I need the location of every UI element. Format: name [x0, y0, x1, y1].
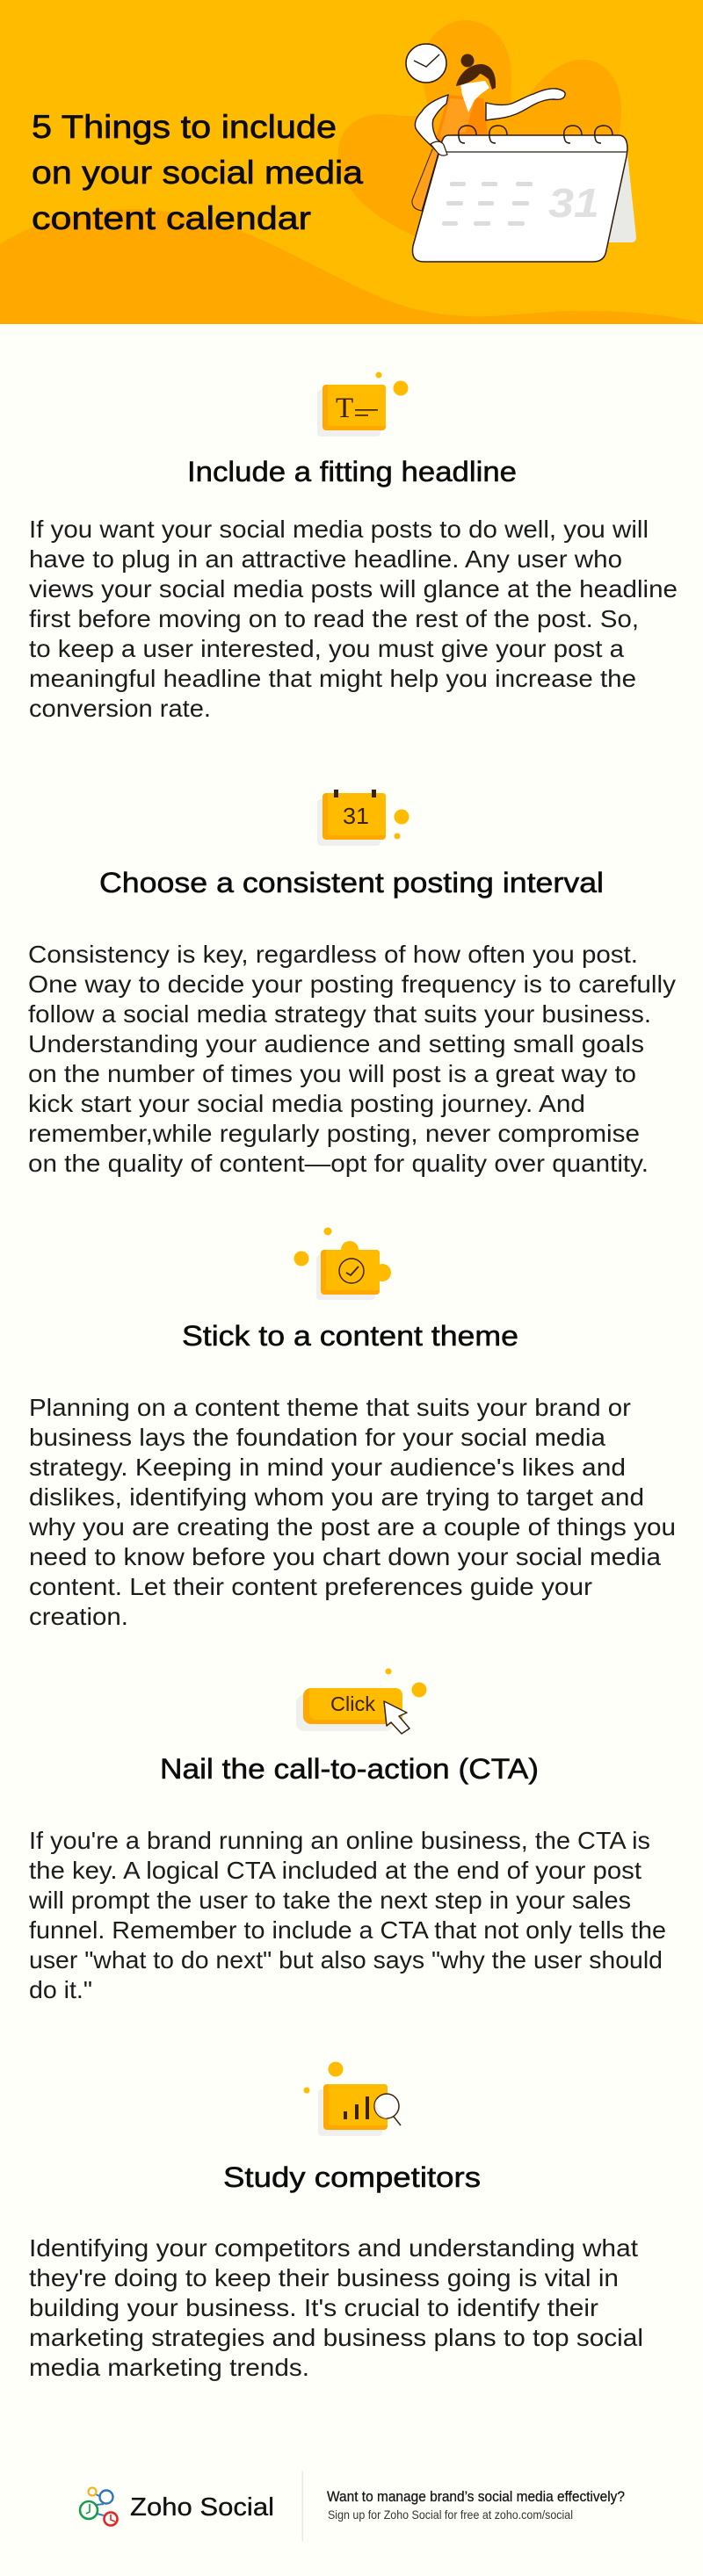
footer call to action: Want to manage brand’s social media effectively? — [327, 2488, 625, 2505]
title: on your social media — [32, 155, 363, 191]
section 5 paragraph: they're doing to keep their business going is vital in — [29, 2264, 619, 2291]
section 2 paragraph: follow a social media strategy that suits your business. — [28, 1000, 651, 1028]
section 2 paragraph: One way to decide your posting frequency is to carefully — [28, 971, 676, 998]
section 1 paragraph: have to plug in an attractive headline. Any user who — [29, 545, 622, 573]
section 3 paragraph: Planning on a content theme that suits your brand or — [29, 1394, 631, 1421]
section 5 heading: Study competitors — [223, 2161, 481, 2193]
section 1 paragraph: views your social media posts will glance at the headline — [29, 575, 678, 603]
section 4 icon: click button with cursor — [296, 1669, 427, 1734]
section 2 paragraph: on the number of times you will post is a great way to — [28, 1060, 636, 1087]
footer: Zoho Social logo: Zoho Social — [130, 2493, 274, 2522]
section 1 paragraph: to keep a user interested, you must give your post a — [29, 635, 624, 662]
title — [32, 109, 363, 236]
calendar body — [413, 135, 627, 262]
title: 5 Things to include — [32, 109, 337, 145]
section 2 icon: calendar — [317, 790, 409, 846]
calendar header line and rings — [442, 126, 627, 152]
calendar date number: 31 — [548, 180, 599, 226]
title: content calendar — [32, 200, 311, 236]
section 1 paragraph: If you want your social media posts to do well, you will — [29, 516, 649, 543]
footer call to action: Sign up for Zoho Social for free at zoho.com/social — [328, 2507, 573, 2522]
section 2 paragraph: remember,while regularly posting, never compromise — [28, 1120, 640, 1147]
section 3 paragraph — [28, 1394, 676, 1630]
section 4 paragraph: do it." — [29, 1976, 92, 2003]
calendar stand — [606, 154, 636, 242]
section 5 paragraph — [29, 2234, 643, 2381]
section 1 paragraph: conversion rate. — [29, 695, 211, 722]
section 5 icon: bar chart and magnifier — [304, 2062, 401, 2136]
section 2 paragraph: on the quality of content—opt for quality over quantity. — [28, 1150, 649, 1177]
section 5 paragraph: marketing strategies and business plans to top social — [29, 2324, 643, 2351]
calendar date dashes — [442, 182, 533, 226]
section 4 paragraph: user "what to do next" but also says "why the user should — [29, 1946, 663, 1973]
section 2 icon: calendar: 31 — [343, 803, 369, 829]
section 3 paragraph: content. Let their content preferences guide your — [29, 1573, 592, 1600]
footer call to action — [327, 2488, 625, 2522]
section 1 paragraph: first before moving on to read the rest of the post. So, — [29, 605, 639, 632]
section 3 paragraph: strategy. Keeping in mind your audience's likes and — [29, 1454, 626, 1481]
section 4 heading: Nail the call-to-action (CTA) — [160, 1753, 539, 1785]
figure: woman — [412, 54, 565, 211]
section 4 paragraph: will prompt the user to take the next step in your sales — [28, 1887, 631, 1914]
section 1 heading: Include a fitting headline — [187, 456, 517, 487]
section 2 heading: Choose a consistent posting interval — [99, 867, 604, 898]
footer: Zoho Social logo — [80, 2487, 274, 2526]
section 2 paragraph: Consistency is key, regardless of how often you post. — [28, 941, 638, 968]
section 5 paragraph: Identifying your competitors and understanding what — [29, 2234, 638, 2262]
section 1 paragraph: meaningful headline that might help you increase the — [29, 665, 636, 692]
section 1 icon: headline — [317, 372, 408, 437]
section 3 paragraph: creation. — [29, 1603, 128, 1630]
section 4 paragraph — [28, 1827, 666, 2003]
section 3 icon: puzzle piece — [294, 1228, 391, 1300]
section 4 paragraph: the key. A logical CTA included at the end of your post — [29, 1857, 641, 1884]
section 4 paragraph: If you're a brand running an online business, the CTA is — [29, 1827, 650, 1854]
section 5 paragraph: media marketing trends. — [29, 2354, 309, 2381]
section 2 paragraph: kick start your social media posting journey. And — [28, 1090, 585, 1117]
section 5 paragraph: building your business. It's crucial to identify their — [29, 2294, 598, 2321]
icon: wall clock — [406, 44, 446, 83]
illustration: woman with calendar and clock — [406, 44, 636, 262]
section 3 paragraph: need to know before you chart down your social media — [29, 1543, 661, 1570]
section 1 icon: headline: T — [336, 393, 353, 424]
section 2 paragraph — [28, 941, 676, 1177]
section 3 heading: Stick to a content theme — [182, 1320, 518, 1352]
footer divider — [302, 2471, 303, 2542]
section 3 paragraph: business lays the foundation for your social media — [29, 1424, 605, 1451]
section 4 icon: click button with cursor: Click — [330, 1692, 375, 1715]
section 1 paragraph — [29, 516, 678, 722]
section 2 paragraph: Understanding your audience and setting small goals — [28, 1030, 644, 1057]
section 3 paragraph: dislikes, identifying whom you are trying to target and — [29, 1483, 644, 1511]
woman's hand on calendar — [431, 141, 447, 155]
header banner — [0, 0, 703, 324]
section 3 paragraph: why you are creating the post are a couple of things you — [28, 1513, 676, 1541]
section 4 paragraph: funnel. Remember to include a CTA that not only tells the — [29, 1916, 666, 1944]
